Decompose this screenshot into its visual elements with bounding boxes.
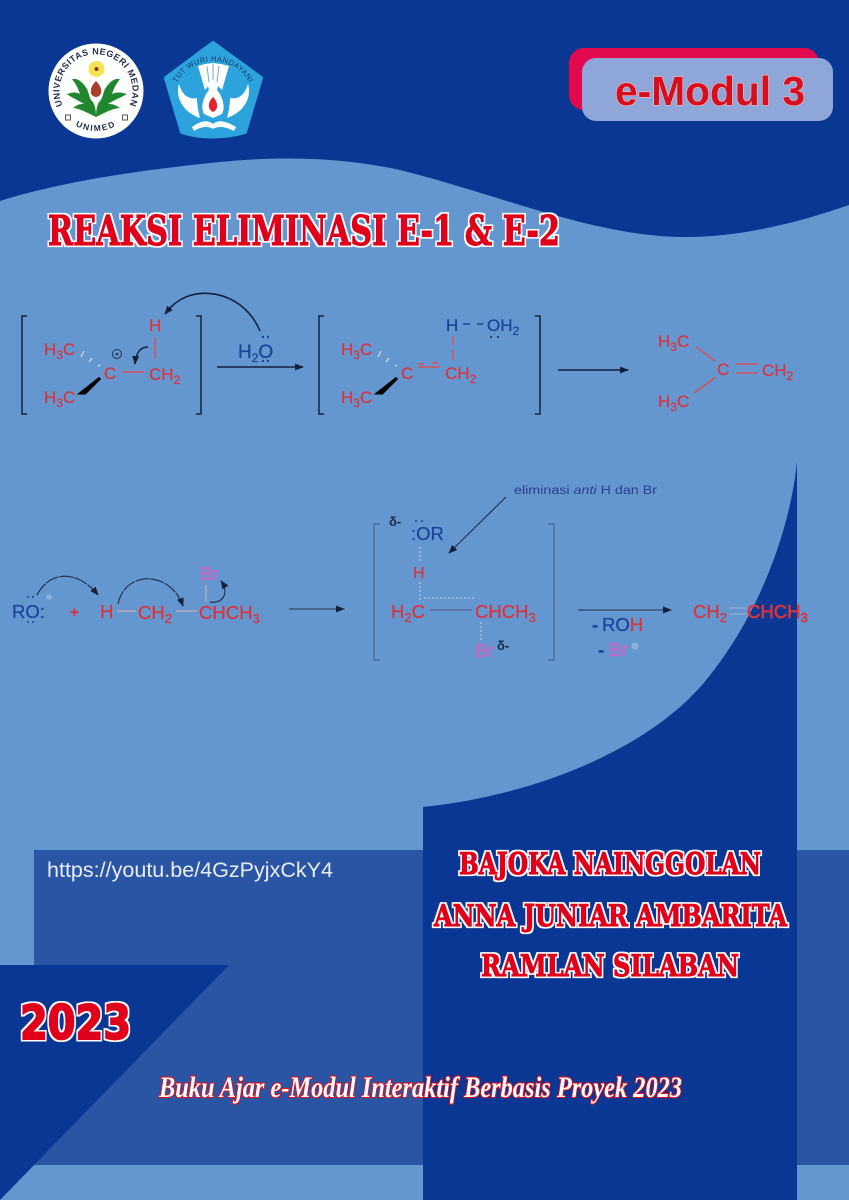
alkene product <box>658 332 794 414</box>
by-products: - <box>592 614 598 635</box>
arrow 4 <box>578 609 671 611</box>
logo: UNIMED: UNIVERSITAS NEGERI MEDAN <box>53 48 139 108</box>
logo: Tut Wuri Handayani <box>164 41 263 138</box>
alkoxide and substrate: + <box>70 604 79 621</box>
alkene product: CH <box>762 361 787 380</box>
arrow 1 <box>217 366 303 368</box>
carbocation intermediate: C <box>104 364 116 383</box>
note: anti elimination: eliminasi anti H dan Br <box>514 485 657 497</box>
alkene product: H <box>658 332 670 351</box>
propene product: 3 <box>800 610 808 625</box>
transition state: 2 <box>512 324 520 338</box>
note: anti elimination <box>449 485 657 553</box>
alkene product: C <box>677 392 689 411</box>
alkoxide and substrate: RO: <box>12 601 45 622</box>
transition state: H <box>341 340 353 359</box>
alkoxide and substrate: CH <box>138 602 165 623</box>
water label: O <box>258 342 273 363</box>
transition state: C <box>360 388 372 407</box>
logo: UNIMED: UNIMED <box>76 120 114 132</box>
carbocation intermediate: CH <box>149 365 174 384</box>
carbocation intermediate: C <box>63 340 75 359</box>
E2 transition state <box>374 514 554 661</box>
by-products: - Br <box>598 639 628 660</box>
logo: UNIMED <box>48 44 144 138</box>
transition state: C <box>401 364 413 383</box>
by-products: ROH <box>602 614 643 635</box>
E2 transition state: CHCH <box>475 601 528 622</box>
propene product: CHCH <box>747 601 800 622</box>
transition state <box>319 316 540 414</box>
water label: H <box>238 342 252 363</box>
transition state: C <box>360 340 372 359</box>
transition state: 3 <box>353 348 360 362</box>
water label <box>238 336 273 365</box>
E2 transition state: C <box>412 601 425 622</box>
right dark curved column <box>423 462 797 1200</box>
transition state: H <box>446 316 458 335</box>
top dark wave <box>0 0 849 237</box>
carbocation intermediate: 3 <box>56 348 63 362</box>
E2 transition state: H <box>413 565 425 582</box>
carbocation intermediate <box>22 316 201 414</box>
logo: Tut Wuri Handayani: TUT WURI HANDAYANI <box>172 56 254 82</box>
carbocation intermediate: H <box>44 340 56 359</box>
arrow 3 <box>289 608 344 610</box>
link: https://youtu.be/4GzPyjxCkY4 <box>47 858 333 882</box>
authors: BAJOKA NAINGGOLAN <box>459 847 761 882</box>
reaction: E1 mechanism <box>22 293 794 414</box>
subtitle: Buku Ajar e-Modul Interaktif Berbasis Proyek 2023 <box>158 1071 682 1104</box>
alkoxide and substrate: H <box>100 601 113 622</box>
alkene product: C <box>717 360 729 379</box>
propene product: 2 <box>720 610 727 625</box>
carbocation intermediate: 3 <box>56 396 63 410</box>
alkoxide and substrate: 3 <box>252 611 260 626</box>
transition state: OH <box>487 316 512 335</box>
by-products <box>592 614 643 660</box>
badge: e-Modul 3: e-Modul 3 <box>615 68 805 114</box>
transition state: 2 <box>470 372 477 386</box>
alkene product: 3 <box>670 400 677 414</box>
carbocation intermediate: H <box>44 388 56 407</box>
alkene product: 2 <box>787 369 794 383</box>
E2 transition state: δ- <box>497 638 509 653</box>
alkoxide and substrate: Br <box>200 563 218 584</box>
E2 transition state: H <box>391 601 404 622</box>
transition state: CH <box>445 364 470 383</box>
water attack arrow <box>165 293 260 331</box>
badge: e-Modul 3 <box>569 48 833 121</box>
alkene product: 3 <box>670 340 677 354</box>
carbocation intermediate: C <box>63 388 75 407</box>
propene product: CH <box>693 601 720 622</box>
authors: RAMLAN SILABAN <box>481 949 739 984</box>
carbocation intermediate: H <box>149 316 161 335</box>
E2 transition state: 3 <box>528 610 536 625</box>
left dark triangle panel <box>0 965 229 1200</box>
alkoxide and substrate <box>12 563 260 626</box>
alkoxide and substrate: 2 <box>165 611 172 626</box>
reaction: E2 mechanism <box>12 485 808 661</box>
year: 2023 <box>20 996 131 1051</box>
propene product <box>693 601 808 625</box>
E2 transition state: δ- <box>389 514 401 529</box>
E2 transition state: Br <box>475 640 494 661</box>
water label: 2 <box>252 351 259 365</box>
alkene product: H <box>658 392 670 411</box>
E2 transition state: 2 <box>404 610 412 625</box>
alkene product: C <box>677 332 689 351</box>
title: REAKSI ELIMINASI E-1 & E-2 <box>48 207 560 255</box>
E2 transition state: :OR <box>411 523 444 544</box>
arrow 2 <box>558 369 628 371</box>
authors <box>433 847 788 984</box>
alkoxide and substrate: CHCH <box>199 602 252 623</box>
transition state: H <box>341 388 353 407</box>
carbocation intermediate: 2 <box>174 373 181 387</box>
bottom mid-blue panel <box>34 850 849 1165</box>
transition state: 3 <box>353 396 360 410</box>
